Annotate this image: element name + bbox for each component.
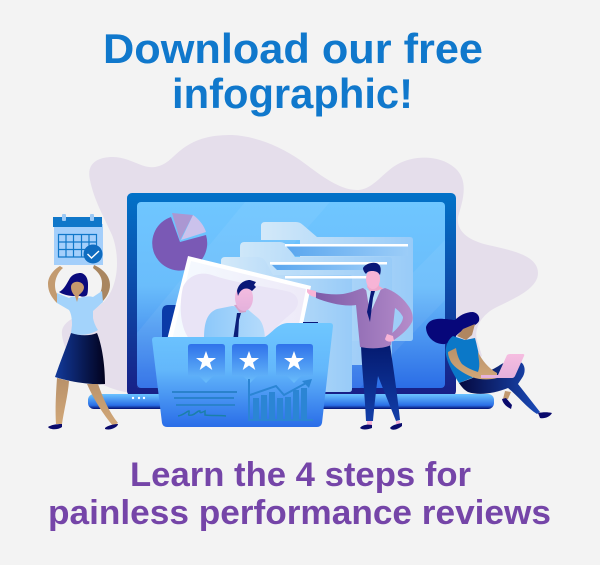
call to action: painless performance reviews bbox=[48, 494, 551, 532]
bar chart bbox=[248, 379, 313, 421]
head bbox=[71, 282, 84, 302]
seated woman with laptop bbox=[426, 312, 552, 418]
shoes bbox=[48, 424, 118, 430]
check badge bbox=[84, 244, 102, 264]
folder bbox=[152, 323, 333, 427]
ankles bbox=[367, 421, 400, 425]
skirt bbox=[55, 333, 105, 384]
legs bbox=[56, 378, 118, 426]
arm bbox=[448, 348, 497, 379]
dark tab behind folder bbox=[303, 322, 318, 325]
call to action: Learn the 4 steps for bbox=[130, 456, 471, 494]
woman holding calendar bbox=[48, 214, 118, 430]
top bbox=[57, 291, 103, 335]
dark element behind photo bbox=[162, 305, 180, 337]
employee photo bbox=[167, 256, 311, 340]
shoes bbox=[360, 423, 402, 430]
back folders on screen bbox=[221, 222, 413, 392]
arms bbox=[48, 266, 63, 303]
calendar bbox=[53, 214, 103, 265]
hair bbox=[426, 312, 479, 344]
shirt bbox=[446, 336, 487, 383]
background blob bbox=[62, 135, 538, 392]
trousers bbox=[459, 361, 540, 414]
hair bbox=[59, 273, 88, 297]
star badge 3 bbox=[276, 344, 313, 383]
trousers bbox=[361, 345, 400, 421]
call to action bbox=[48, 456, 551, 532]
laptop bbox=[481, 354, 524, 378]
laptop screen bbox=[137, 202, 445, 388]
shirt and tie bbox=[366, 289, 381, 322]
pie chart bbox=[152, 213, 207, 271]
man pointing at photo bbox=[307, 263, 413, 430]
laptop monitor bbox=[127, 193, 456, 396]
document lines bbox=[270, 244, 408, 278]
jacket bbox=[315, 288, 413, 348]
shoes bbox=[502, 398, 552, 418]
document text lines and signature bbox=[172, 391, 237, 416]
head bbox=[457, 324, 475, 340]
title: Download our free bbox=[103, 25, 483, 72]
title: infographic! bbox=[172, 70, 413, 117]
title bbox=[103, 25, 483, 117]
star badge 2 bbox=[232, 344, 268, 383]
screen light streaks bbox=[137, 202, 445, 388]
person in photo bbox=[204, 280, 265, 340]
head bbox=[363, 263, 384, 294]
ankle bbox=[503, 391, 511, 399]
hands bbox=[307, 289, 394, 342]
laptop base bbox=[88, 394, 494, 409]
star badge 1 bbox=[188, 344, 225, 383]
